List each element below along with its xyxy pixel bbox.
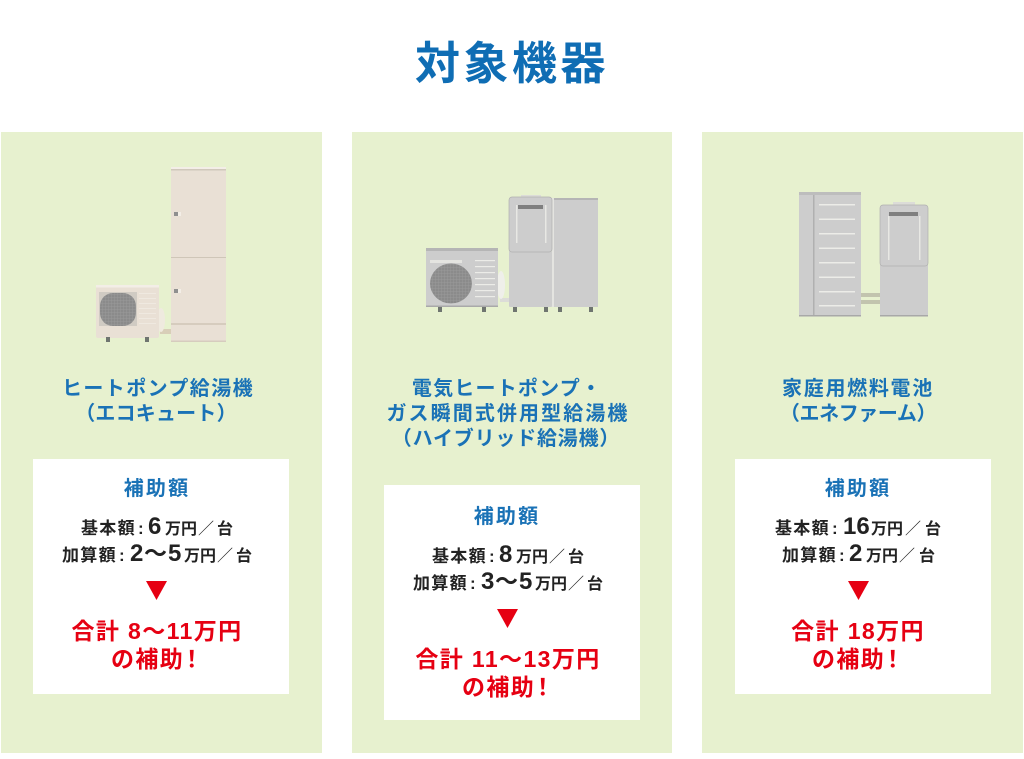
subsidy box: 合計 11～13万円 (415, 646, 601, 672)
subsidy box: 台 (919, 546, 935, 565)
panel: hybrid (352, 132, 672, 753)
subsidy box: 万円 (871, 521, 903, 538)
subsidy box: 2 (130, 540, 143, 567)
subsidy box: ／ (905, 521, 921, 538)
subsidy box: 万円 (535, 576, 567, 593)
subsidy box: 台 (217, 519, 233, 538)
icon: fuel cell (799, 192, 928, 316)
title: 対象機器 (415, 38, 609, 89)
subsidy box: 基本額 (775, 519, 830, 538)
product name (62, 377, 254, 425)
subsidy box: 台 (925, 519, 941, 538)
panel: ene-farm (702, 132, 1023, 753)
subsidy box (33, 459, 289, 694)
subsidy box: 加算額 (413, 573, 468, 593)
subsidy box: 台 (587, 574, 603, 593)
subsidy box: 補助額 (124, 477, 190, 500)
product name (780, 377, 936, 425)
subsidy box: 16 (843, 513, 870, 540)
subsidy box: 万円 (866, 548, 898, 565)
subsidy box: 8 (499, 541, 512, 568)
subsidy box: 加算額 (782, 545, 837, 565)
subsidy box: : (470, 574, 477, 593)
icon: eco cute water heater (96, 167, 226, 342)
product name: （エネファーム） (780, 402, 936, 425)
subsidy box: ／ (549, 549, 565, 566)
subsidy box: 万円 (516, 549, 548, 566)
subsidy box: 台 (236, 546, 252, 565)
subsidy box: : (832, 519, 839, 538)
subsidy box (735, 459, 991, 694)
subsidy box: 合計 8～11万円 (71, 618, 243, 644)
product name (386, 377, 630, 450)
subsidy box: 補助額 (825, 477, 891, 500)
product name: 家庭用燃料電池 (782, 377, 934, 400)
subsidy box: 3 (481, 568, 494, 595)
subsidy box: ／ (899, 548, 915, 565)
subsidy box: 2 (849, 540, 862, 567)
subsidy box: 基本額 (432, 547, 487, 566)
subsidy box: 万円 (184, 548, 216, 565)
subsidy box: : (138, 519, 145, 538)
subsidy box: 合計 18万円 (791, 618, 925, 644)
subsidy box: 基本額 (81, 519, 136, 538)
icon: hybrid water heater (426, 195, 598, 312)
product name: （エコキュート） (75, 402, 237, 425)
subsidy box: : (119, 546, 126, 565)
subsidy box: の補助！ (812, 646, 906, 672)
subsidy box: 台 (568, 547, 584, 566)
subsidy box: ～ (495, 568, 518, 594)
subsidy box: の補助！ (462, 674, 556, 700)
panel: eco cute (1, 132, 322, 753)
subsidy box (384, 485, 640, 720)
product name: ガス瞬間式併用型給湯機 (386, 402, 630, 425)
subsidy box: の補助！ (111, 646, 205, 672)
subsidy box: ／ (217, 548, 233, 565)
subsidy box: ～ (144, 540, 167, 566)
product name: ヒートポンプ給湯機 (62, 377, 254, 400)
subsidy box: 補助額 (474, 505, 540, 528)
subsidy box: 6 (148, 513, 161, 540)
product name: （ハイブリッド給湯機） (392, 426, 620, 450)
subsidy box: 万円 (165, 521, 197, 538)
subsidy box: 5 (168, 540, 181, 567)
product name: 電気ヒートポンプ・ (412, 377, 602, 400)
subsidy box: ／ (198, 521, 214, 538)
subsidy box: 5 (519, 568, 532, 595)
subsidy box: : (839, 546, 846, 565)
subsidy box: : (489, 547, 496, 566)
subsidy box: 加算額 (62, 545, 117, 565)
subsidy box: ／ (568, 576, 584, 593)
